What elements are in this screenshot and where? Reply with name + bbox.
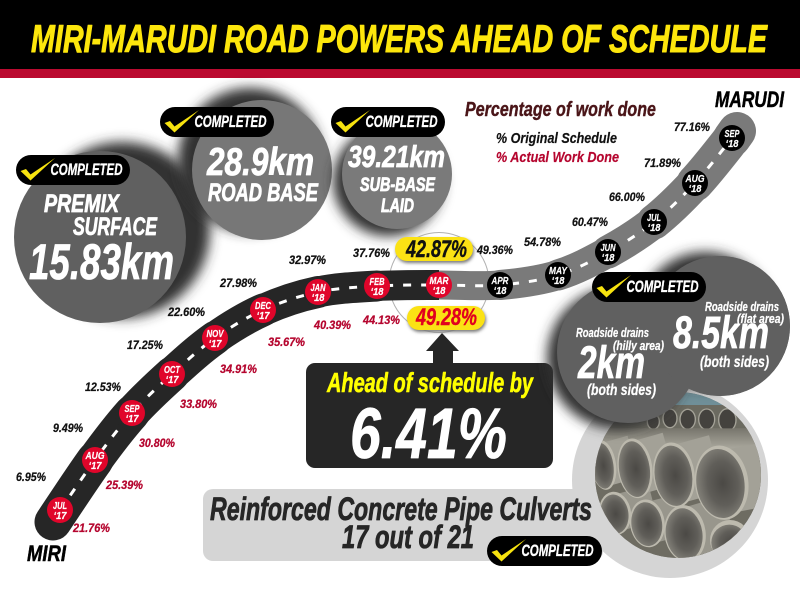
actual work percentages: 35.67% bbox=[268, 335, 305, 349]
badge: completed culverts: COMPLETED bbox=[522, 541, 594, 560]
panel: road base bbox=[178, 88, 332, 240]
panel: roadside drains hilly area bbox=[547, 256, 790, 429]
drains text: hilly area: (hilly area) bbox=[613, 338, 664, 353]
magnifier ring around March bbox=[389, 232, 489, 332]
milestone: Oct 17: ‘17 bbox=[166, 374, 180, 386]
milestone: Sep 18: ‘18 bbox=[726, 138, 739, 150]
milestone: Jul 18: JUL bbox=[647, 212, 661, 224]
milestone: Aug 17: AUG bbox=[85, 450, 104, 462]
milestone: Nov 17 bbox=[202, 325, 228, 351]
panel: road base: ROAD BASE bbox=[208, 179, 319, 207]
panel: premix surface: PREMIX bbox=[44, 190, 120, 218]
milestone: Sep 17: ‘17 bbox=[126, 413, 140, 425]
legend: percentage of work done: % Original Schedule bbox=[496, 130, 617, 147]
original schedule percentages: 27.98% bbox=[219, 276, 257, 290]
actual work percentages: 21.76% bbox=[72, 521, 110, 535]
panel: sub-base laid: SUB-BASE bbox=[360, 175, 436, 196]
milestone: Jul 18: ‘18 bbox=[648, 222, 661, 234]
original schedule percentages: 37.76% bbox=[353, 246, 390, 260]
milestone: Jun 18 bbox=[595, 239, 621, 265]
drains text: flat area: (both sides) bbox=[700, 354, 769, 371]
milestone: Dec 17: ‘17 bbox=[256, 310, 271, 322]
road: completed section bbox=[53, 285, 439, 522]
milestone: Jul 17 bbox=[47, 497, 73, 523]
original schedule percentages: 12.53% bbox=[85, 380, 121, 394]
panel: sub-base laid bbox=[333, 119, 452, 236]
panel: sub-base laid: 39.21km bbox=[348, 139, 445, 174]
legend: percentage of work done: % Actual Work Done bbox=[496, 149, 619, 166]
actual work percentages: 44.13% bbox=[362, 313, 400, 327]
milestone: May 18: MAY bbox=[549, 265, 568, 277]
original schedule percentages: 9.49% bbox=[53, 421, 83, 435]
road timeline bbox=[47, 125, 745, 523]
legend: percentage of work done: Percentage of work done bbox=[465, 99, 656, 121]
original schedule percentages: 22.60% bbox=[167, 305, 205, 319]
badge: completed road base: COMPLETED bbox=[194, 112, 266, 131]
milestone: Mar 18: MAR bbox=[430, 275, 449, 287]
milestone: Aug 18: AUG bbox=[685, 173, 704, 185]
original schedule percentages: 77.16% bbox=[674, 120, 710, 134]
milestone: Sep 18 bbox=[719, 125, 745, 151]
panel: premix surface: SURFACE bbox=[73, 213, 158, 241]
panel: concrete pipe culverts: Reinforced Concrete Pipe Culverts bbox=[210, 491, 592, 527]
actual work percentages bbox=[72, 313, 400, 535]
milestone: Oct 17: OCT bbox=[164, 364, 181, 376]
actual work percentages: 33.80% bbox=[180, 397, 217, 411]
badge: completed drains bbox=[592, 272, 706, 302]
original schedule percentages: 54.78% bbox=[524, 235, 561, 249]
milestone: Dec 17: DEC bbox=[255, 300, 271, 312]
badge: completed sub-base bbox=[331, 107, 445, 137]
drains text: flat area: 8.5km bbox=[673, 307, 769, 358]
milestone: Dec 17 bbox=[250, 297, 276, 323]
badge: completed sub-base: COMPLETED bbox=[366, 112, 438, 131]
milestone: May 18 bbox=[545, 262, 571, 288]
milestone: Aug 17: ‘17 bbox=[88, 460, 103, 472]
callout: March actual work: 49.28% bbox=[415, 304, 477, 331]
panel: ahead of schedule: Ahead of schedule by bbox=[326, 367, 534, 398]
drains text: flat area bbox=[673, 299, 784, 371]
panel: premix surface bbox=[14, 142, 210, 323]
milestone: Feb 18: ‘18 bbox=[370, 286, 384, 298]
milestone: Feb 18: FEB bbox=[370, 276, 385, 288]
milestone: Jul 17: JUL bbox=[53, 500, 67, 512]
milestone: Mar 18: ‘18 bbox=[432, 285, 446, 297]
road: remaining section bbox=[439, 131, 737, 286]
original schedule percentages: 60.47% bbox=[572, 215, 608, 229]
milestone: Jun 18: ‘18 bbox=[602, 252, 615, 264]
badge: completed drains: COMPLETED bbox=[626, 277, 698, 296]
actual work percentages: 40.39% bbox=[313, 318, 351, 332]
original schedule percentages: 32.97% bbox=[289, 253, 326, 267]
milestone: Aug 17 bbox=[82, 447, 108, 473]
original schedule percentages: 71.89% bbox=[644, 156, 681, 170]
milestone: Feb 18 bbox=[364, 273, 390, 299]
drains text: flat area: (flat area) bbox=[737, 311, 784, 326]
original schedule percentages: 66.00% bbox=[609, 190, 645, 204]
actual work percentages: 30.80% bbox=[139, 436, 175, 450]
badge: completed culverts bbox=[487, 536, 602, 566]
arrow: up to March callout bbox=[426, 333, 459, 365]
panel: concrete pipe culverts bbox=[203, 382, 768, 578]
milestone: Jan 18 bbox=[305, 279, 331, 305]
legend: percentage of work done bbox=[465, 99, 656, 166]
panel: sub-base laid: LAID bbox=[381, 196, 414, 217]
milestone: Aug 18: ‘18 bbox=[688, 183, 702, 195]
actual work percentages: 34.91% bbox=[220, 362, 257, 376]
milestone: Sep 18: SEP bbox=[724, 128, 740, 140]
badge: completed premix bbox=[16, 155, 130, 185]
panel: roadside drains flat area bbox=[637, 252, 790, 396]
actual work percentages: 25.39% bbox=[105, 478, 143, 492]
drains text: hilly area: 2km bbox=[577, 337, 645, 388]
milestone: Sep 17 bbox=[119, 400, 145, 426]
milestone: Apr 18 bbox=[487, 272, 513, 298]
panel: concrete pipe culverts: 17 out of 21 bbox=[342, 519, 474, 555]
label: Miri: MIRI bbox=[27, 541, 67, 566]
header band bbox=[0, 0, 800, 78]
original schedule percentages bbox=[16, 120, 710, 484]
milestone: Jul 17: ‘17 bbox=[54, 510, 68, 522]
milestone: Oct 17 bbox=[159, 361, 185, 387]
milestone: Nov 17: ‘17 bbox=[208, 338, 223, 350]
milestone: Mar 18 bbox=[426, 272, 452, 298]
panel: ahead of schedule: 6.41% bbox=[350, 395, 507, 474]
milestone: Apr 18: APR bbox=[491, 275, 509, 287]
drains text: hilly area: Roadside drains bbox=[576, 325, 649, 340]
drains text: hilly area bbox=[576, 325, 664, 399]
badge: completed premix: COMPLETED bbox=[50, 160, 122, 179]
panel: premix surface: 15.83km bbox=[29, 234, 174, 290]
panel: ahead of schedule bbox=[306, 363, 553, 474]
drains text: hilly area: (both sides) bbox=[587, 382, 656, 399]
original schedule percentages: 17.25% bbox=[127, 338, 163, 352]
milestone: Aug 18 bbox=[682, 170, 708, 196]
callout: March original schedule: 42.87% bbox=[405, 236, 467, 263]
milestone: Apr 18: ‘18 bbox=[494, 285, 507, 297]
milestone: Sep 17: SEP bbox=[124, 403, 140, 415]
panel: road base: 28.9km bbox=[206, 141, 314, 184]
original schedule percentages: 6.95% bbox=[16, 470, 46, 484]
road: centre dashes bbox=[60, 138, 732, 510]
milestone: Jan 18: JAN bbox=[310, 282, 326, 294]
milestone: Jul 18 bbox=[641, 209, 667, 235]
milestone: May 18: ‘18 bbox=[552, 275, 565, 287]
original schedule percentages: 49.36% bbox=[476, 243, 513, 257]
milestone: Jun 18: JUN bbox=[600, 242, 616, 254]
milestone: Jan 18: ‘18 bbox=[312, 292, 325, 304]
photo: stacked concrete pipes bbox=[595, 392, 761, 558]
badge: completed road base bbox=[160, 107, 274, 137]
milestone: Nov 17: NOV bbox=[206, 328, 224, 340]
